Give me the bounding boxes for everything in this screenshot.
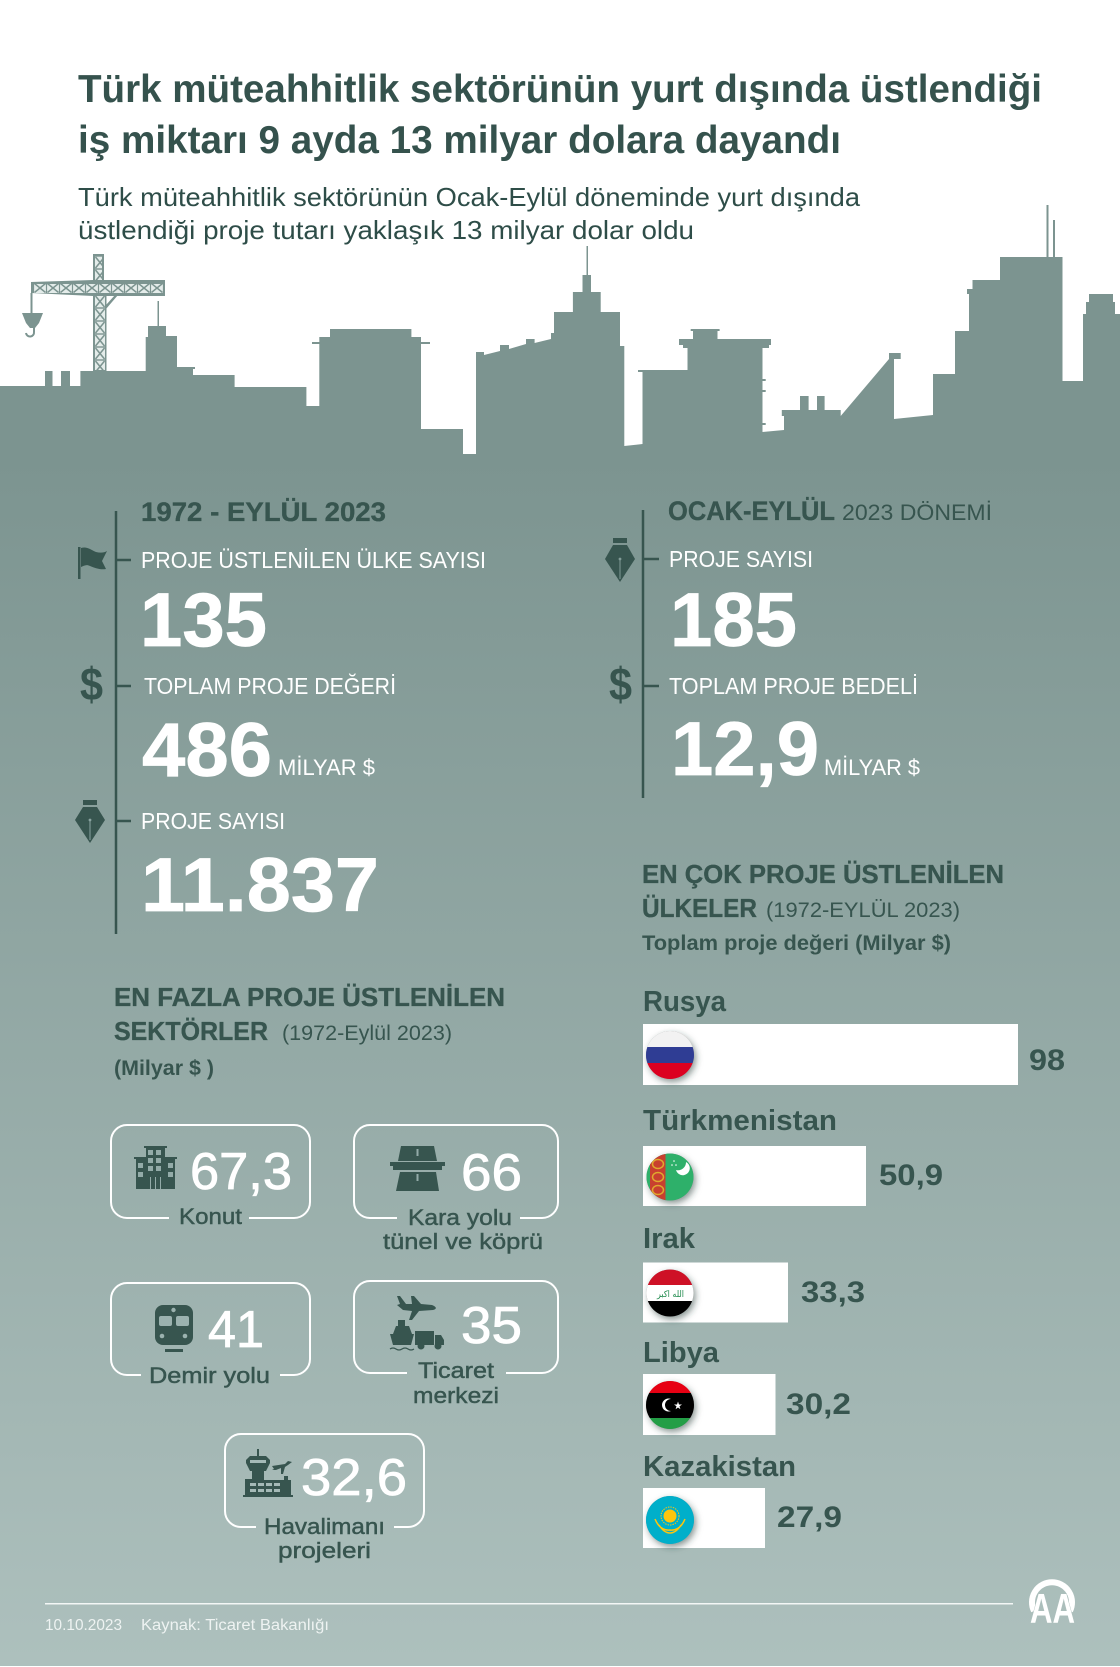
subtitle: Türk müteahhitlik sektörünün Ocak-Eylül döneminde yurt dışında [78, 182, 861, 212]
source: Kaynak: Ticaret Bakanlığı [141, 1617, 329, 1634]
background gradient panel [0, 456, 1120, 1666]
bar: Rusya: 98 [1029, 1044, 1065, 1077]
icon: plane ship truck [390, 1296, 444, 1350]
title: iş miktarı 9 ayda 13 milyar dolara dayandı [78, 119, 841, 162]
label: country count: PROJE ÜSTLENİLEN ÜLKE SAYISI [141, 547, 486, 573]
subtitle: üstlendiği proje tutarı yaklaşık 13 milyar dolar oldu [78, 215, 694, 245]
heading: countries [642, 859, 1004, 955]
label: total project value: TOPLAM PROJE DEĞERİ [144, 673, 396, 699]
icon: airport tower [243, 1449, 293, 1497]
label: merkezi [413, 1383, 499, 1408]
panel: sectors [111, 982, 558, 1563]
label: Kara yolu [408, 1205, 512, 1230]
label: total project cost: TOPLAM PROJE BEDELİ [669, 673, 918, 699]
flag: Iraq: الله اكبر [656, 1290, 684, 1300]
bar: Irak [643, 1223, 865, 1322]
panel: 1972 - Eylül 2023 totals [75, 497, 486, 934]
value: 486 milyar dollars: 486 [142, 708, 272, 793]
icon: building [134, 1146, 177, 1189]
heading: countries: (1972-EYLÜL 2023) [766, 898, 960, 922]
value: 32,6 [301, 1449, 407, 1507]
panel: Ocak-Eylül 2023 [605, 496, 992, 798]
flag: Russia [644, 1030, 696, 1080]
card: Konut [111, 1125, 310, 1229]
heading: Ocak-Eylül 2023 dönemi: 2023 DÖNEMİ [842, 500, 992, 525]
heading: countries: EN ÇOK PROJE ÜSTLENİLEN [642, 859, 1004, 889]
value: 41 [208, 1301, 264, 1359]
card: Demir yolu [111, 1283, 310, 1388]
label: project count: PROJE SAYISI [141, 808, 285, 834]
card: Ticaret merkezi [354, 1281, 558, 1408]
icon: fountain pen nib [75, 800, 105, 843]
flag: Kazakhstan [645, 1495, 695, 1545]
bar: Kazakistan: Kazakistan [643, 1451, 796, 1483]
title [78, 68, 1042, 162]
heading: sectors: EN FAZLA PROJE ÜSTLENİLEN [114, 982, 505, 1012]
heading: sectors: (Milyar $ ) [114, 1057, 214, 1080]
date: 10.10.2023 [45, 1617, 122, 1634]
icon: train [155, 1305, 193, 1352]
heading: 1972 - Eylül 2023: 1972 - EYLÜL 2023 [141, 497, 386, 527]
value: 35 [461, 1297, 522, 1355]
value: 12,9 milyar dollars: MİLYAR $ [824, 755, 920, 780]
label [413, 1358, 499, 1408]
timeline rule left [116, 511, 131, 934]
city skyline silhouette [0, 205, 1120, 460]
value: 67,3 [190, 1143, 292, 1201]
heading: sectors: (1972-Eylül 2023) [282, 1021, 452, 1045]
bar: Türkmenistan: Türkmenistan [643, 1105, 837, 1137]
label [383, 1205, 543, 1254]
heading: sectors: SEKTÖRLER [114, 1016, 268, 1046]
label [264, 1514, 385, 1563]
bar: Kazakistan: 27,9 [777, 1501, 842, 1534]
value: 185: 185 [670, 578, 797, 663]
panel: top countries chart [642, 859, 1065, 1548]
icon: flag [78, 547, 107, 579]
value: 12,9 milyar dollars [671, 707, 920, 792]
icon: dollar: $ [609, 658, 632, 710]
value: 486 milyar dollars: MİLYAR $ [278, 755, 375, 780]
bar: Libya: 30,2 [786, 1388, 851, 1421]
bar: Libya [643, 1337, 851, 1435]
bar: Türkmenistan [643, 1105, 943, 1206]
card: Kara yolu [354, 1125, 558, 1254]
value: 66 [461, 1144, 522, 1202]
heading: Ocak-Eylül 2023 dönemi: OCAK-EYLÜL [668, 496, 835, 526]
heading: countries: Toplam proje değeri (Milyar $) [642, 932, 951, 955]
heading: Ocak-Eylül 2023 dönemi [668, 496, 992, 526]
value: 486 milyar dollars [142, 708, 375, 793]
label: Ticaret [418, 1358, 494, 1383]
title: Türk müteahhitlik sektörünün yurt dışında üstlendiği [78, 68, 1042, 111]
bar: Kazakistan [643, 1451, 842, 1548]
label: projeleri [278, 1538, 371, 1563]
label: Konut [179, 1204, 242, 1229]
bar: Libya: Libya [643, 1337, 720, 1369]
bar: Rusya [643, 986, 1065, 1085]
icon: dollar: $ [80, 658, 103, 710]
icon: fountain pen nib [605, 538, 635, 582]
bar: Rusya: Rusya [643, 986, 727, 1018]
icon: highway [390, 1146, 445, 1191]
heading: countries: ÜLKELER [642, 893, 757, 923]
label: Demir yolu [149, 1363, 270, 1388]
footer [45, 1582, 1075, 1634]
bar: Irak: 33,3 [801, 1276, 865, 1309]
flag: Iraq [645, 1269, 695, 1317]
card: Havalimanı projeleri [225, 1434, 424, 1563]
value: 11.837: 11.837 [141, 843, 379, 928]
label: Havalimanı [264, 1514, 385, 1539]
icon: AA logo: AA [1030, 1585, 1075, 1632]
heading: sectors [114, 982, 505, 1080]
value: 135: 135 [140, 578, 267, 663]
bar: Irak: Irak [643, 1223, 696, 1255]
label: project count: PROJE SAYISI [669, 546, 813, 572]
subtitle [78, 182, 861, 245]
flag: Libya [645, 1380, 695, 1430]
icon: construction crane [22, 254, 165, 372]
value: 12,9 milyar dollars: 12,9 [671, 707, 819, 792]
bar: Türkmenistan: 50,9 [879, 1159, 943, 1192]
label: tünel ve köprü [383, 1229, 543, 1254]
timeline rule right [643, 510, 659, 798]
flag: Turkmenistan [645, 1152, 695, 1202]
